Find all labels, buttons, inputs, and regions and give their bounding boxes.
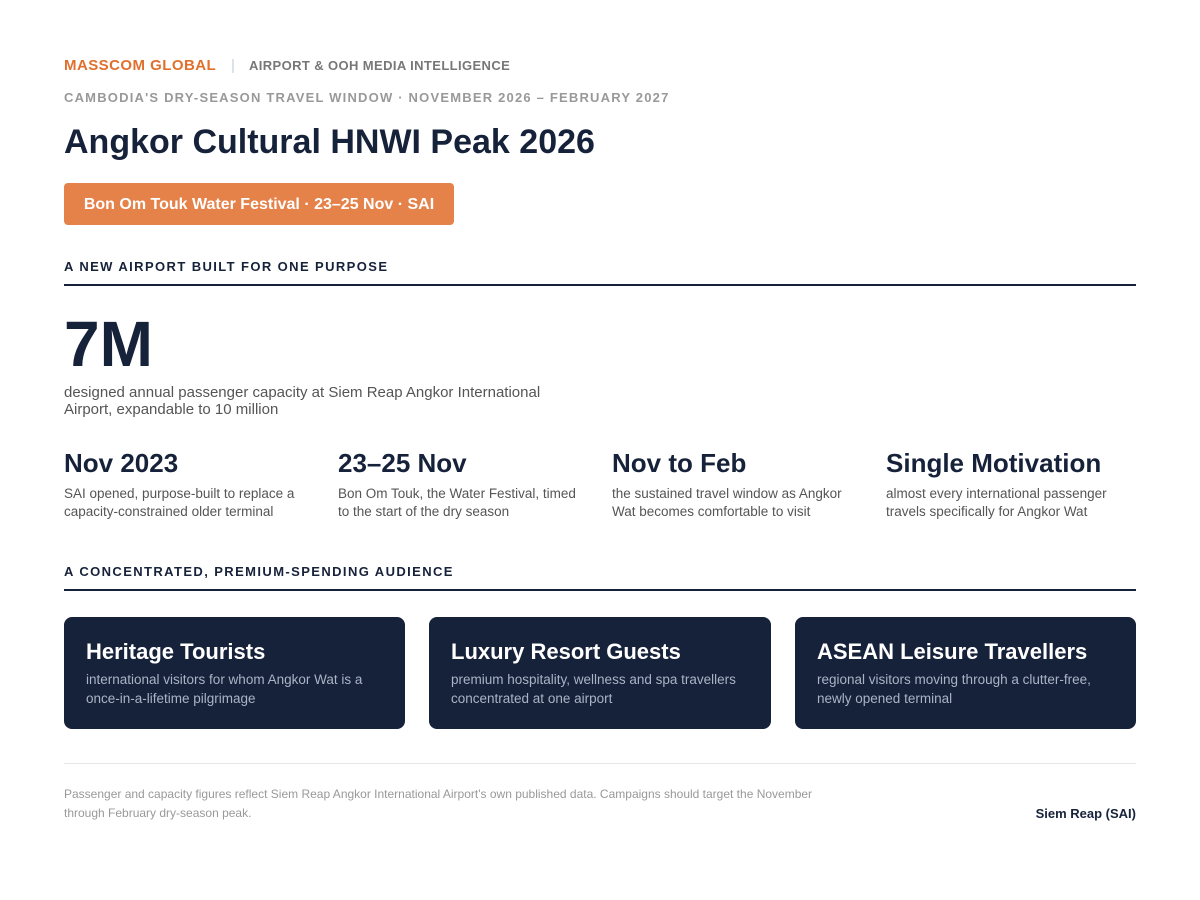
footnote: Passenger and capacity figures reflect Siem Reap Angkor International Airport's own published data. Campaigns should target the November — [64, 787, 812, 801]
stat: Nov to Feb: Wat becomes comfortable to visit — [612, 504, 810, 519]
hero stat: 7M — [64, 308, 153, 380]
stat: 23–25 Nov: Bon Om Touk, the Water Festival, timed — [338, 486, 576, 501]
hero stat description — [64, 384, 540, 418]
stat: Nov to Feb — [612, 448, 842, 519]
location label: Siem Reap (SAI) — [1036, 806, 1136, 821]
card: Heritage Tourists: Heritage Tourists — [86, 639, 265, 664]
stat: Nov to Feb: the sustained travel window as Angkor — [612, 486, 842, 501]
stat: Single Motivation — [886, 448, 1107, 519]
stat: Nov 2023 — [64, 448, 294, 519]
stat: 23–25 Nov: to the start of the dry season — [338, 504, 509, 519]
stat: 23–25 Nov — [338, 448, 576, 519]
card: Luxury Resort Guests: concentrated at one airport — [451, 691, 612, 706]
hero stat description: Airport, expandable to 10 million — [64, 401, 278, 418]
footnote — [64, 787, 812, 820]
divider — [232, 59, 234, 73]
stat: Single Motivation: almost every international passenger — [886, 486, 1107, 501]
event badge: Bon Om Touk Water Festival · 23–25 Nov · SAI — [84, 196, 434, 213]
eyebrow: CAMBODIA'S DRY-SEASON TRAVEL WINDOW · NOVEMBER 2026 – FEBRUARY 2027 — [64, 90, 670, 105]
brand tagline: AIRPORT & OOH MEDIA INTELLIGENCE — [249, 58, 510, 73]
stat: Single Motivation: travels specifically for Angkor Wat — [886, 504, 1087, 519]
stat: Nov 2023: Nov 2023 — [64, 448, 178, 478]
card: ASEAN Leisure Travellers: ASEAN Leisure Travellers — [817, 639, 1087, 664]
stat: 23–25 Nov: 23–25 Nov — [338, 448, 467, 478]
stat: Nov to Feb: Nov to Feb — [612, 448, 746, 478]
card: Luxury Resort Guests: Luxury Resort Guests — [451, 639, 681, 664]
card: ASEAN Leisure Travellers — [795, 617, 1136, 729]
card: Luxury Resort Guests: premium hospitality, wellness and spa travellers — [451, 672, 736, 687]
card: ASEAN Leisure Travellers: regional visitors moving through a clutter-free, — [817, 672, 1091, 687]
section heading: airport: A NEW AIRPORT BUILT FOR ONE PURPOSE — [64, 259, 388, 274]
stat: Single Motivation: Single Motivation — [886, 448, 1101, 478]
card: Heritage Tourists: international visitors for whom Angkor Wat is a — [86, 672, 362, 687]
card: Luxury Resort Guests — [429, 617, 771, 729]
event badge — [64, 183, 454, 225]
card: ASEAN Leisure Travellers: newly opened terminal — [817, 691, 952, 706]
footnote: through February dry-season peak. — [64, 806, 251, 820]
hero stat description: designed annual passenger capacity at Siem Reap Angkor International — [64, 384, 540, 401]
header brand line — [64, 57, 510, 74]
card: Heritage Tourists — [64, 617, 405, 729]
title: Angkor Cultural HNWI Peak 2026 — [64, 123, 595, 161]
stat: Nov 2023: SAI opened, purpose-built to replace a — [64, 486, 294, 501]
section heading: audience: A CONCENTRATED, PREMIUM-SPENDING AUDIENCE — [64, 564, 454, 579]
card: Heritage Tourists: once-in-a-lifetime pilgrimage — [86, 691, 256, 706]
stat: Nov 2023: capacity-constrained older terminal — [64, 504, 273, 519]
brand name: MASSCOM GLOBAL — [64, 57, 216, 74]
